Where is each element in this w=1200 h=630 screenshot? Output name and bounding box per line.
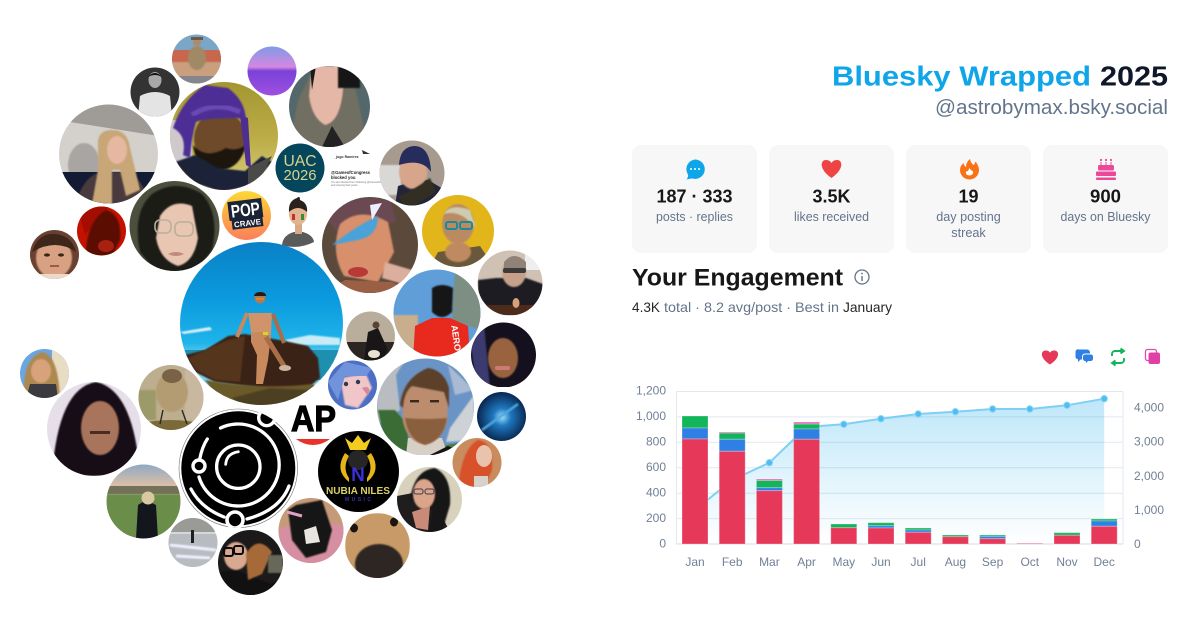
stat card: days on Bluesky: days on Bluesky [1060,210,1151,224]
avatar: child portrait [30,230,80,280]
avatar: black orbital logo [179,409,298,528]
stat card: streak: 19 [958,186,978,206]
avatar: blocked tweet screenshot: blocked you [331,175,356,180]
avatar: long grey hair woman [289,66,370,147]
right axis labels: 2,000 [1134,469,1164,483]
month labels: Apr [797,555,816,569]
avatar: blocked tweet screenshot: and viewing their posts. [331,183,358,187]
avatar: silhouette on bright water [168,518,218,568]
icon: birthday cake [1096,159,1116,180]
month labels: Jun [871,555,891,569]
avatar: figure in dark room [346,311,396,362]
right axis labels: 0 [1134,537,1141,551]
avatar: Nubia Niles Music logo: NUBIA NILES [326,486,390,497]
avatar: drag makeup portrait [322,197,420,295]
handle: @astrobymax.bsky.social [935,97,1168,119]
avatar: red toned figure [77,206,127,256]
right axis labels [1134,400,1164,551]
avatar: Nubia Niles Music logo: MUSIC [345,497,371,503]
avatar: woman with red hair [452,438,502,488]
month labels: Jan [685,555,705,569]
avatar: anime character [328,360,378,410]
avatar: Pop Crave logo: POP [230,198,261,222]
icon: chat bubble [686,159,705,180]
stacked bars [682,416,1117,544]
month labels: Jul [911,555,926,569]
month labels: Sep [982,555,1004,569]
right axis labels: 4,000 [1134,400,1164,414]
avatar: blocked tweet screenshot [331,150,391,187]
avatar: woman with braids [471,322,536,387]
stat card: streak [906,145,1031,253]
avatar: purple headwrap [170,82,278,192]
avatar: small bird [138,365,205,431]
month labels: Feb [722,555,743,569]
avatar: blonde woman selfie [20,349,70,399]
stat card: likes: 3.5K [812,186,850,206]
avatar: black and white portrait [130,67,180,117]
engagement summary: 4.3K [632,299,661,315]
legend [1042,348,1160,366]
avatar: long black hair man [47,382,141,476]
avatar: man with teal glasses [422,195,494,267]
left axis labels: 200 [646,511,666,525]
avatar: cartoon character [282,197,314,247]
avatar: man in navy beanie [379,140,445,206]
stat card: days on Bluesky: 900 [1090,186,1121,206]
stat card: likes [769,145,894,253]
icon: info [855,270,869,284]
avatar: galaxy [477,392,527,442]
avatar: blocked tweet screenshot: @GameofCongress [331,170,371,175]
stat card: streak: day posting [936,210,1001,224]
engagement summary: total · 8.2 avg/post · Best in [664,299,839,315]
stat card: posts and replies [632,145,757,253]
right axis labels: 1,000 [1134,503,1164,517]
left axis labels: 600 [646,460,666,474]
stat card: streak: streak [951,226,987,240]
avatar: blocked tweet screenshot: You are blocked from following @GameofCongress [331,180,391,184]
engagement summary [632,299,892,315]
avatar: bearded man outdoors [377,358,474,455]
avatar: black and white kitten [278,498,344,564]
avatar: dog nose closeup [345,513,410,584]
avatar: woman with dog [218,530,283,595]
month labels: May [832,555,855,569]
title [832,60,1168,92]
title: Bluesky Wrapped [832,60,1091,92]
stat card: days on Bluesky [1043,145,1168,253]
icon: legend likes [1042,350,1058,364]
month labels: Dec [1094,555,1115,569]
icon: legend reposts [1112,348,1124,366]
cumulative line [695,396,1107,510]
left axis labels [636,384,666,550]
combined chart [636,384,1164,569]
avatar: woman with glasses and black hair [397,467,462,532]
icon: legend replies [1076,349,1093,363]
avatar: woman in meadow [106,464,181,539]
avatar: man on rock by sea (largest) [180,242,345,408]
avatar: UAC 2026 logo [275,143,325,193]
left axis labels: 400 [646,486,666,500]
avatar: Nubia Niles Music logo: N [351,465,365,486]
avatar: UAC 2026 logo: 2026 [284,167,316,184]
icon: flame [960,159,979,180]
month labels: Nov [1056,555,1078,569]
cumulative area [695,399,1104,544]
engagement summary: January [843,299,892,315]
avatar: Pop Crave logo: CRAVE [234,217,262,229]
avatar: blocked tweet screenshot: _jugo Ramirez [333,155,359,159]
icon: legend quotes [1146,350,1160,364]
left axis labels: 1,000 [636,409,666,423]
left axis labels: 800 [646,434,666,448]
month labels: Oct [1020,555,1040,569]
avatar: man in red AERO shirt: AERO [449,324,463,352]
left axis labels: 0 [659,536,666,550]
avatar: curly hair woman with glasses [129,181,220,272]
month labels [685,555,1115,569]
stat card: posts and replies: 187 · 333 [656,186,732,206]
month labels: Aug [945,555,966,569]
avatar: blonde woman [59,104,159,204]
avatar: man in red AERO shirt [393,269,481,360]
title: 2025 [1100,60,1168,92]
avatar: man with egg [478,250,543,315]
month labels: Mar [759,555,780,569]
right axis labels: 3,000 [1134,434,1164,448]
icon: heart [822,160,841,178]
avatar cluster [20,34,543,595]
avatar: man in hat on rocks [172,34,222,84]
stat card: posts and replies: posts · replies [656,210,733,224]
avatar: purple sea [247,46,297,96]
avatar: Pop Crave logo [222,191,272,241]
avatar: UAC 2026 logo: UAC [284,153,316,170]
avatar: AP logo: AP [291,398,336,439]
avatar: Nubia Niles Music logo [318,431,399,512]
stat card: likes: likes received [794,210,869,224]
left axis labels: 1,200 [636,384,666,398]
heading: Your Engagement: Your Engagement [632,264,843,292]
